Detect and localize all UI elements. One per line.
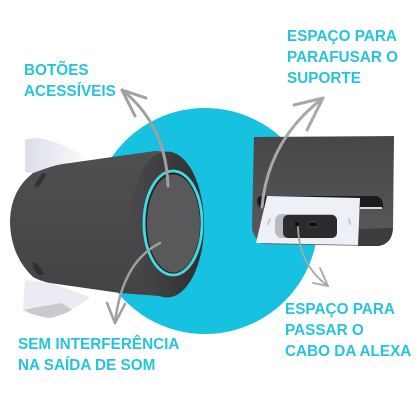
lower shade — [358, 228, 393, 246]
cyan light ring — [144, 171, 202, 275]
label: sound output: SEM INTERFERÊNCIA — [18, 335, 179, 353]
port connector — [308, 222, 318, 227]
bottom bracket — [23, 280, 90, 318]
cylinder body — [10, 151, 172, 297]
cable port — [283, 215, 337, 238]
bracket lower shade — [24, 303, 72, 318]
arrow: buttons — [122, 90, 168, 186]
body notch bottom — [33, 262, 44, 275]
label: screw space: PARAFUSAR O — [287, 49, 398, 66]
label: sound output: NA SAÍDA DE SOM — [18, 357, 155, 374]
screw right — [349, 219, 350, 224]
dark base — [252, 136, 394, 246]
label: cable space: PASSAR O — [285, 322, 364, 339]
label: cable space: CABO DA ALEXA — [285, 343, 411, 360]
label: screw space: ESPAÇO PARA — [287, 28, 397, 45]
port socket — [295, 222, 299, 226]
speaker with wall bracket — [10, 138, 204, 318]
base panel detail — [252, 136, 394, 246]
arrow: screw space — [262, 98, 323, 207]
front bevel — [130, 152, 204, 298]
arrow: sound output — [107, 243, 160, 323]
speaker top face — [147, 174, 200, 272]
top bracket — [25, 138, 87, 173]
slot highlight — [360, 207, 382, 209]
label: buttons: BOTÕES — [24, 61, 89, 79]
white plate — [256, 196, 360, 245]
plate recess — [275, 214, 337, 238]
slot — [257, 196, 383, 208]
background circle — [92, 108, 318, 334]
body notch top — [34, 173, 47, 188]
label: buttons: ACESSÍVEIS — [24, 83, 116, 100]
screw left — [268, 219, 270, 224]
label: cable space: ESPAÇO PARA — [285, 301, 395, 318]
label: screw space: SUPORTE — [287, 70, 361, 87]
arrow: cable space — [298, 227, 328, 286]
